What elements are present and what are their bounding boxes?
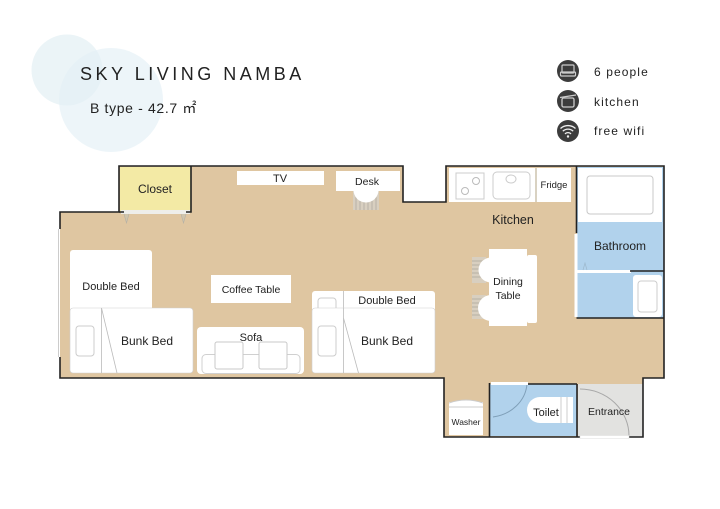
- bathroom: [574, 167, 664, 318]
- window: [58, 229, 60, 357]
- toilet room: [490, 384, 577, 436]
- right bunk bed: Bunk Bed: [361, 334, 413, 348]
- label: 6 people: 6 people: [594, 65, 649, 79]
- desk with chair: Desk: [355, 176, 380, 188]
- entrance threshold: [580, 436, 629, 438]
- label: kitchen: kitchen: [594, 95, 640, 109]
- floor: [60, 166, 664, 437]
- closet: Closet: [138, 182, 173, 196]
- right double bed: Double Bed: [358, 295, 416, 307]
- coffee table: [211, 275, 291, 303]
- toilet door threshold: [491, 382, 528, 385]
- desk with chair: [336, 171, 400, 210]
- kitchen label: Kitchen: [492, 213, 534, 227]
- floor plan: [58, 166, 664, 438]
- toilet room: Toilet: [533, 407, 559, 419]
- right bunk bed: [312, 308, 435, 373]
- bathroom: Bathroom: [594, 239, 646, 253]
- kitchen counter: [449, 168, 571, 202]
- left double bed: Double Bed: [82, 281, 140, 293]
- amenity list: [557, 60, 649, 142]
- left double bed: [70, 250, 152, 320]
- closet: [120, 167, 191, 223]
- entrance: Entrance: [588, 406, 630, 418]
- sofa: Sofa: [240, 332, 263, 344]
- right double bed: [312, 291, 435, 321]
- icon: wifi: [557, 120, 579, 142]
- washer: Washer: [452, 417, 481, 427]
- walls: [60, 166, 664, 437]
- dining table with chairs: Table: [495, 290, 521, 302]
- sofa: [197, 327, 304, 374]
- kitchen counter: Fridge: [541, 180, 567, 191]
- TV: TV: [273, 173, 288, 185]
- left bunk bed: Bunk Bed: [121, 334, 173, 348]
- TV: [237, 171, 324, 185]
- dining table with chairs: [472, 249, 537, 326]
- title: SKY LIVING NAMBA: [80, 64, 305, 84]
- subtitle: B type - 42.7 ㎡: [90, 100, 197, 116]
- coffee table: Coffee Table: [222, 284, 280, 296]
- decorative circles: [32, 34, 163, 152]
- entrance: [578, 384, 643, 437]
- dining table with chairs: Dining: [493, 276, 523, 288]
- icon: bed: [557, 60, 579, 82]
- label: free wifi: free wifi: [594, 124, 645, 138]
- icon: kitchen pot: [557, 90, 579, 112]
- washer: [449, 400, 483, 435]
- left bunk bed: [70, 308, 193, 373]
